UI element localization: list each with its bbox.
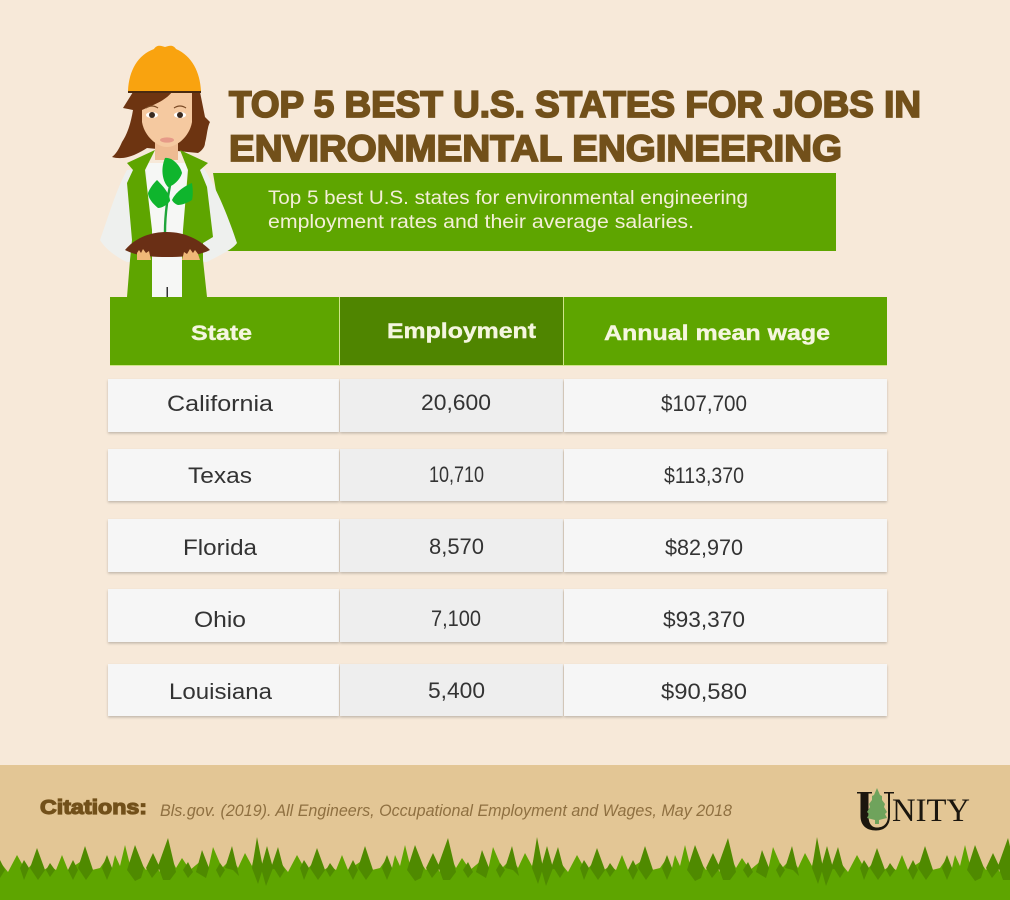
table row: Louisiana: $90,580 (661, 679, 747, 704)
table row: Louisiana: 5,400 (428, 678, 485, 703)
table row: Florida: 8,570 (429, 534, 484, 559)
face (142, 92, 192, 147)
seedling (148, 158, 193, 232)
table row: Texas: $113,370 (664, 463, 744, 488)
green vest (127, 150, 155, 297)
subtitle text: employment rates and their average salaries. (268, 212, 694, 233)
fringe (142, 92, 172, 110)
header labels: Annual mean wage (604, 322, 830, 345)
header labels: Employment (387, 320, 536, 343)
white shirt (146, 163, 187, 297)
citations (40, 797, 733, 820)
table header (110, 297, 887, 366)
subtitle text: Top 5 best U.S. states for environmental engineering (268, 188, 748, 209)
table row: Ohio: 7,100 (431, 606, 481, 631)
citations: Citations: (40, 797, 147, 819)
table row: Texas: 10,710 (429, 462, 484, 487)
lab coat (100, 167, 237, 262)
logo U (857, 792, 894, 830)
title: ENVIRONMENTAL ENGINEERING (229, 127, 842, 169)
citations: Bls.gov. (2019). All Engineers, Occupational Employment and Wages, May 2018 (160, 801, 733, 820)
logo: Unity (857, 788, 970, 830)
table row: California (108, 379, 887, 432)
table row: Florida: $82,970 (665, 535, 743, 560)
table row: California: California (167, 391, 274, 416)
title: TOP 5 BEST U.S. STATES FOR JOBS IN (229, 83, 921, 125)
footer band (0, 765, 1010, 900)
header labels (191, 320, 830, 345)
table row: Florida: Florida (183, 535, 258, 560)
header labels: State (191, 322, 252, 345)
title (229, 83, 921, 169)
hard hat (128, 90, 201, 93)
table row: Florida (108, 519, 887, 572)
table row: Texas: Texas (188, 463, 252, 488)
subtitle banner (213, 173, 836, 251)
table row: California: $107,700 (661, 391, 747, 416)
hair (112, 92, 210, 158)
table row: Louisiana (108, 664, 887, 716)
soil (125, 232, 210, 257)
logo tree (867, 788, 887, 824)
illustration: engineer holding a seedling (100, 46, 237, 297)
hands (137, 249, 200, 260)
table row: Ohio (108, 589, 887, 642)
table row: Ohio: Ohio (194, 607, 246, 632)
trouser slit (166, 287, 168, 297)
table row: California: 20,600 (421, 390, 491, 415)
logo wordmark: NITY (892, 793, 970, 829)
table row: Louisiana: Louisiana (169, 679, 273, 704)
neck (155, 135, 178, 160)
eyes and mouth (146, 106, 186, 143)
grass strip (0, 837, 1010, 900)
table row: Texas (108, 449, 887, 501)
table row: Ohio: $93,370 (663, 607, 745, 632)
subtitle text (268, 188, 748, 233)
